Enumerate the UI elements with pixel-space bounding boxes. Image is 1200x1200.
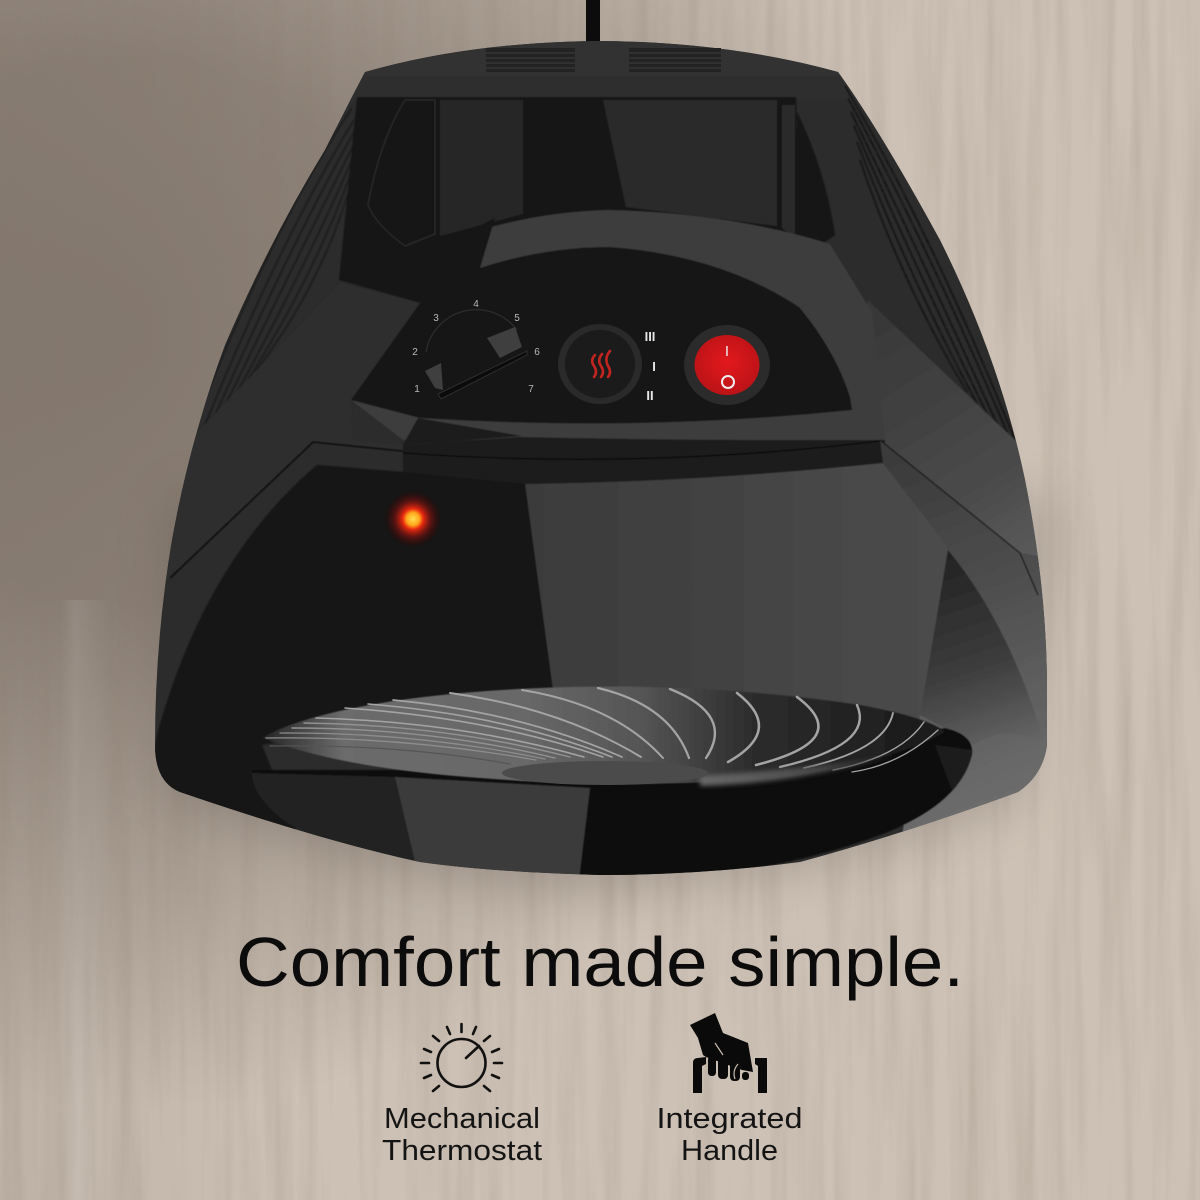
switch bezel (684, 325, 770, 405)
cavity bottom reflection (395, 777, 590, 880)
label: integrated handle: Integrated (656, 1103, 802, 1135)
speed marks (645, 329, 656, 403)
left shoulder facet (130, 283, 420, 640)
black arch reflection wedge (420, 218, 495, 303)
thermostat dial (412, 299, 540, 399)
indicator light (384, 490, 442, 548)
fan hub (502, 761, 708, 785)
grille ribs (266, 688, 938, 772)
speed marks: I (652, 359, 656, 374)
dial numbers: 4 (473, 299, 479, 310)
right pillar (782, 105, 795, 238)
dial wedge lower (425, 363, 443, 390)
dial numbers (412, 299, 540, 395)
heat setting button (558, 324, 656, 404)
button ring (558, 324, 642, 404)
icon: integrated handle (690, 1013, 767, 1093)
dial wedge upper (487, 327, 522, 358)
on mark: I (725, 343, 729, 360)
off mark (722, 376, 734, 388)
right ribbed side (845, 86, 1015, 440)
left ribbed side (193, 108, 354, 430)
dial numbers: 7 (528, 384, 534, 395)
heater body (130, 30, 1060, 880)
fan cavity (252, 728, 972, 880)
heat icon (592, 351, 610, 377)
control panel arch (351, 247, 852, 423)
label: mechanical thermostat: Thermostat (382, 1135, 542, 1167)
dial ring (426, 310, 517, 352)
dark band (403, 437, 885, 484)
label: mechanical thermostat (382, 1103, 542, 1167)
window reflection left (440, 100, 523, 236)
dark wedge under dial (403, 418, 522, 445)
speed marks: II (646, 388, 654, 403)
right shoulder facet (850, 300, 1060, 560)
body facets (130, 30, 1060, 880)
left dark face (150, 465, 553, 840)
dial pointer (438, 351, 527, 399)
right seam (880, 440, 1038, 595)
upper vents (486, 48, 721, 72)
window reflection right (603, 100, 777, 226)
cavity right reflection (935, 745, 972, 790)
grille lower glow (700, 752, 905, 786)
fan grille (262, 687, 945, 786)
dial numbers: 2 (412, 347, 418, 358)
right window slot (797, 112, 835, 245)
dial numbers: 1 (414, 384, 420, 395)
headline: Comfort made simple. (236, 923, 964, 1001)
switch face (694, 335, 760, 395)
left seam (170, 442, 403, 578)
power cord (586, 0, 600, 44)
right lower band (880, 440, 1060, 850)
dial numbers: 6 (534, 347, 540, 358)
grille disc (262, 687, 945, 784)
left window reflection (368, 100, 435, 246)
band line (403, 441, 880, 459)
label: integrated handle: Handle (681, 1135, 778, 1167)
icon: mechanical thermostat dial (421, 1024, 502, 1091)
center gray reflection (525, 463, 948, 720)
label: mechanical thermostat: Mechanical (384, 1103, 540, 1135)
window surround (339, 97, 800, 303)
speed marks: III (645, 329, 655, 344)
label: integrated handle (656, 1103, 802, 1167)
cavity left lip (252, 773, 418, 866)
dial numbers: 5 (514, 313, 520, 324)
top cap (350, 41, 858, 100)
right inner facet (920, 550, 1034, 742)
power rocker switch (684, 325, 770, 405)
body silhouette (155, 41, 1047, 875)
gray arch band (351, 210, 885, 440)
dial numbers: 3 (433, 313, 439, 324)
